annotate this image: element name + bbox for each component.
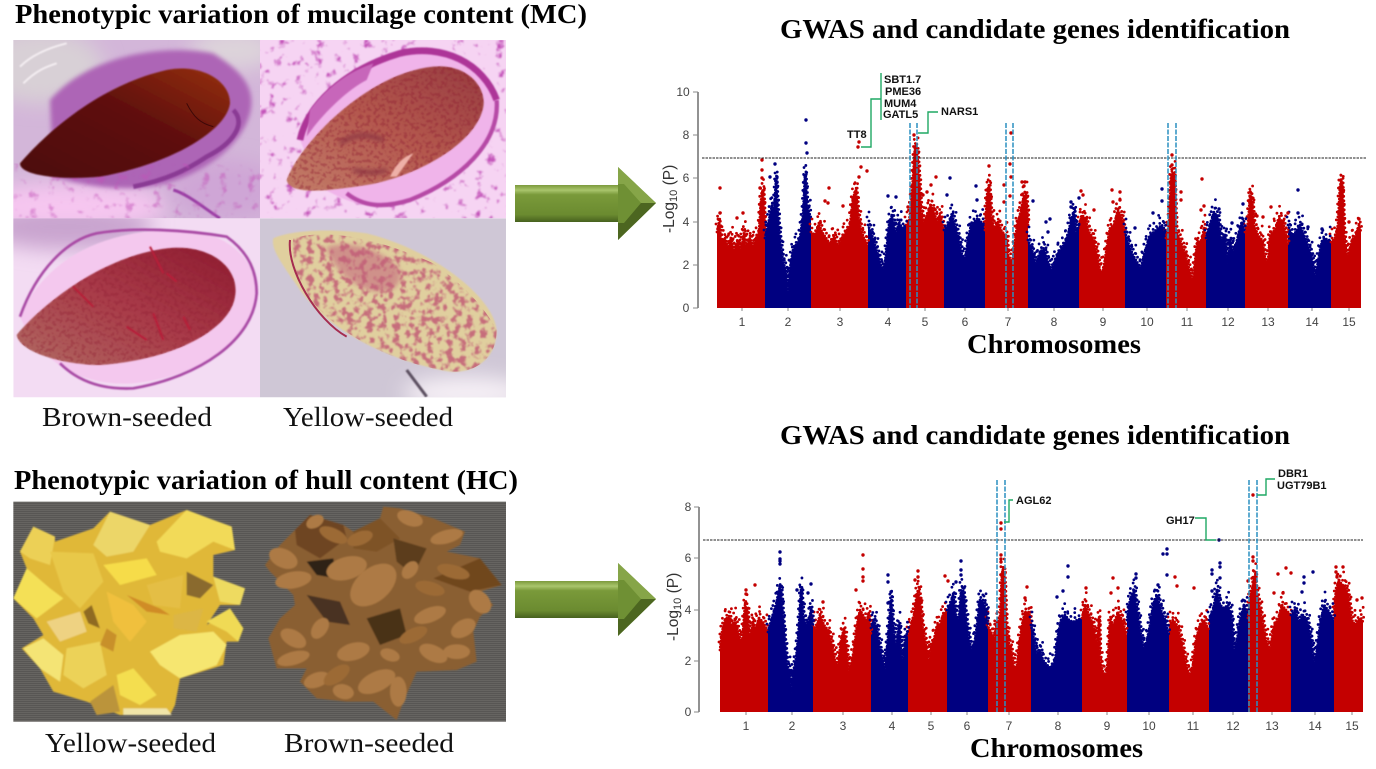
panel: stained seed photographs bbox=[0, 30, 530, 410]
y axis bbox=[676, 85, 698, 315]
title: GWAS bottom: GWAS and candidate genes identification bbox=[780, 420, 1290, 450]
candidate regions bbox=[997, 480, 1257, 712]
panel: hull photographs bbox=[13, 502, 506, 722]
photo: yellow hulls bbox=[13, 510, 245, 715]
y axis: 6 bbox=[683, 171, 690, 185]
chromosome numbers: 3 bbox=[840, 719, 847, 733]
chromosome numbers: 12 bbox=[1226, 719, 1240, 733]
heading: hull content: Phenotypic variation of hull content (HC) bbox=[14, 465, 518, 495]
x axis title: Chromosomes bbox=[970, 733, 1143, 763]
chromosome numbers: 10 bbox=[1142, 719, 1156, 733]
photo: brown seed 3 bbox=[13, 218, 260, 398]
label: yellow-seeded hulls: Yellow-seeded bbox=[45, 728, 217, 758]
chromosome numbers: 2 bbox=[785, 315, 792, 329]
y axis: 2 bbox=[683, 258, 690, 272]
significance threshold bbox=[702, 157, 1367, 159]
chromosome numbers: 1 bbox=[743, 719, 750, 733]
chromosome numbers: 3 bbox=[837, 315, 844, 329]
y axis title: -Log bbox=[661, 202, 678, 233]
chromosome numbers: 11 bbox=[1187, 719, 1200, 733]
gene callouts: TT8 bbox=[847, 129, 867, 141]
chromosome numbers: 14 bbox=[1305, 315, 1319, 329]
significance threshold bbox=[703, 539, 1363, 541]
chromosome numbers: 1 bbox=[739, 315, 746, 329]
gene callouts: SBT1.7 bbox=[884, 74, 921, 86]
candidate regions bbox=[910, 123, 1176, 308]
chromosome numbers: 7 bbox=[1006, 719, 1013, 733]
y axis title: -Log bbox=[665, 610, 682, 641]
chromosome numbers: 4 bbox=[885, 315, 892, 329]
chromosome numbers: 8 bbox=[1051, 315, 1058, 329]
photo: yellow seed bbox=[260, 218, 506, 398]
chromosome numbers: 9 bbox=[1104, 719, 1111, 733]
chromosome numbers: 9 bbox=[1100, 315, 1107, 329]
y axis: 4 bbox=[683, 215, 690, 229]
y axis: 6 bbox=[685, 551, 692, 565]
chromosome numbers: 13 bbox=[1265, 719, 1279, 733]
red chromosomes bbox=[720, 572, 1363, 712]
dense SNP cloud above the chromosomes bbox=[716, 134, 1362, 292]
blue chromosomes bbox=[765, 175, 1331, 308]
chromosome numbers: 5 bbox=[928, 719, 935, 733]
y axis: 2 bbox=[685, 654, 692, 668]
gene callouts bbox=[847, 73, 978, 147]
chromosome numbers: 15 bbox=[1342, 315, 1356, 329]
photo background: grey mat bbox=[13, 502, 506, 722]
chromosome numbers: 13 bbox=[1261, 315, 1275, 329]
chromosome numbers: 8 bbox=[1055, 719, 1062, 733]
gene callouts: DBR1 bbox=[1278, 468, 1308, 480]
y axis title: (P) bbox=[665, 573, 682, 598]
blue chromosomes bbox=[768, 590, 1334, 712]
chromosome numbers: 12 bbox=[1221, 315, 1235, 329]
gene callouts: NARS1 bbox=[941, 106, 978, 118]
chromosome numbers: 6 bbox=[962, 315, 969, 329]
photo: brown seed 1 bbox=[13, 40, 260, 218]
photo: brown seed 2 bbox=[260, 40, 506, 218]
chart: Manhattan plot for hull content bbox=[665, 468, 1364, 763]
title: GWAS top: GWAS and candidate genes identification bbox=[780, 14, 1290, 44]
chromosome numbers: 10 bbox=[1140, 315, 1154, 329]
chart: Manhattan plot for mucilage content bbox=[661, 73, 1367, 359]
photo: brown hulls bbox=[265, 507, 502, 720]
chromosome numbers: 4 bbox=[889, 719, 896, 733]
y axis: 4 bbox=[685, 603, 692, 617]
y axis: 10 bbox=[676, 85, 690, 99]
chromosome numbers: 6 bbox=[964, 719, 971, 733]
y axis: 8 bbox=[685, 500, 692, 514]
chromosome numbers: 5 bbox=[922, 315, 929, 329]
y axis title: (P) bbox=[661, 165, 678, 190]
significant and scattered SNP points bbox=[720, 133, 1359, 222]
x axis title: Chromosomes bbox=[967, 329, 1141, 359]
y axis title: 10 bbox=[668, 190, 680, 202]
significant and scattered SNP points bbox=[746, 495, 1362, 602]
chromosome numbers: 7 bbox=[1005, 315, 1012, 329]
chromosome numbers bbox=[743, 712, 1359, 733]
chromosome numbers bbox=[739, 308, 1356, 329]
y axis: 0 bbox=[685, 705, 692, 719]
label: brown-seeded: Brown-seeded bbox=[42, 402, 213, 432]
chromosome numbers: 14 bbox=[1308, 719, 1322, 733]
gene callouts bbox=[1004, 468, 1327, 540]
dense SNP cloud above the chromosomes bbox=[719, 559, 1364, 700]
y axis: 0 bbox=[683, 301, 690, 315]
y axis: 8 bbox=[683, 128, 690, 142]
chromosome numbers: 15 bbox=[1345, 719, 1359, 733]
chromosome numbers: 11 bbox=[1181, 315, 1194, 329]
label: brown-seeded hulls: Brown-seeded bbox=[284, 728, 455, 758]
gene callouts: AGL62 bbox=[1016, 495, 1051, 507]
y axis title: 10 bbox=[672, 598, 684, 610]
gene callouts: GH17 bbox=[1166, 515, 1195, 527]
gene callouts: GATL5 bbox=[883, 109, 918, 121]
arrow: hull to GWAS bbox=[515, 563, 656, 636]
red chromosomes bbox=[717, 147, 1361, 308]
gene callouts: MUM4 bbox=[884, 98, 917, 110]
gene callouts: UGT79B1 bbox=[1277, 480, 1327, 492]
y axis bbox=[685, 500, 699, 719]
chromosome numbers: 2 bbox=[789, 719, 796, 733]
gene callouts: PME36 bbox=[885, 86, 921, 98]
arrow: mucilage to GWAS bbox=[515, 167, 656, 240]
label: yellow-seeded: Yellow-seeded bbox=[283, 402, 454, 432]
